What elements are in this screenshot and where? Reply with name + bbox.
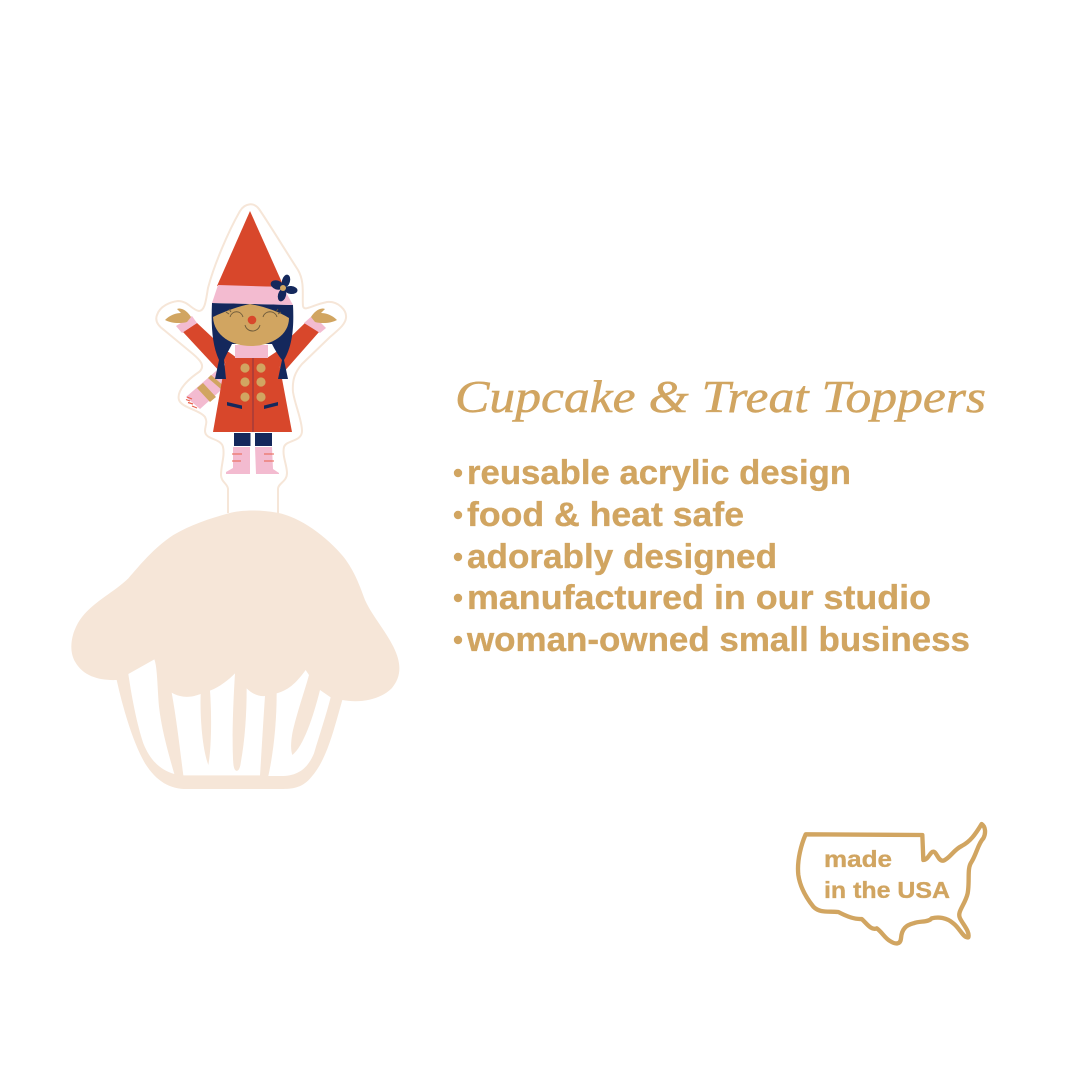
boot stripes [232, 454, 274, 461]
smile, eyes and nose [226, 309, 281, 331]
hat [217, 211, 284, 287]
character: elf girl [165, 211, 337, 474]
USA map outline [798, 824, 985, 943]
hat band [212, 285, 293, 305]
feature: food safe: food & heat safe [467, 496, 744, 534]
cupcake illustration [71, 510, 399, 789]
coat [213, 352, 292, 432]
title: Cupcake & Treat Toppers [455, 372, 986, 422]
coat centre seam [252, 358, 254, 432]
left hand [165, 309, 191, 323]
badge text: made [824, 846, 892, 872]
feature: woman-owned: woman-owned small business [466, 621, 970, 659]
feature list [454, 454, 970, 659]
feature: reusable: reusable acrylic design [467, 454, 851, 492]
hair and braids [212, 303, 293, 379]
right arm [275, 323, 319, 374]
badge text [824, 846, 950, 903]
left cuff [176, 316, 197, 333]
legs [234, 433, 272, 446]
coat pockets [227, 402, 278, 409]
feature: manufactured: manufactured in our studio [467, 579, 931, 617]
made in the USA badge [798, 824, 985, 943]
right hand [311, 309, 337, 323]
boots [226, 447, 279, 474]
face [213, 304, 289, 346]
acrylic topper outline [156, 204, 346, 513]
scarf end [186, 371, 228, 409]
collar [235, 345, 268, 358]
left arm [183, 323, 228, 374]
right cuff [304, 315, 326, 333]
feature: adorable: adorably designed [467, 538, 777, 576]
coat buttons [240, 363, 266, 402]
badge text: in the USA [824, 877, 950, 903]
collar whites [226, 344, 279, 358]
flower [269, 274, 298, 302]
